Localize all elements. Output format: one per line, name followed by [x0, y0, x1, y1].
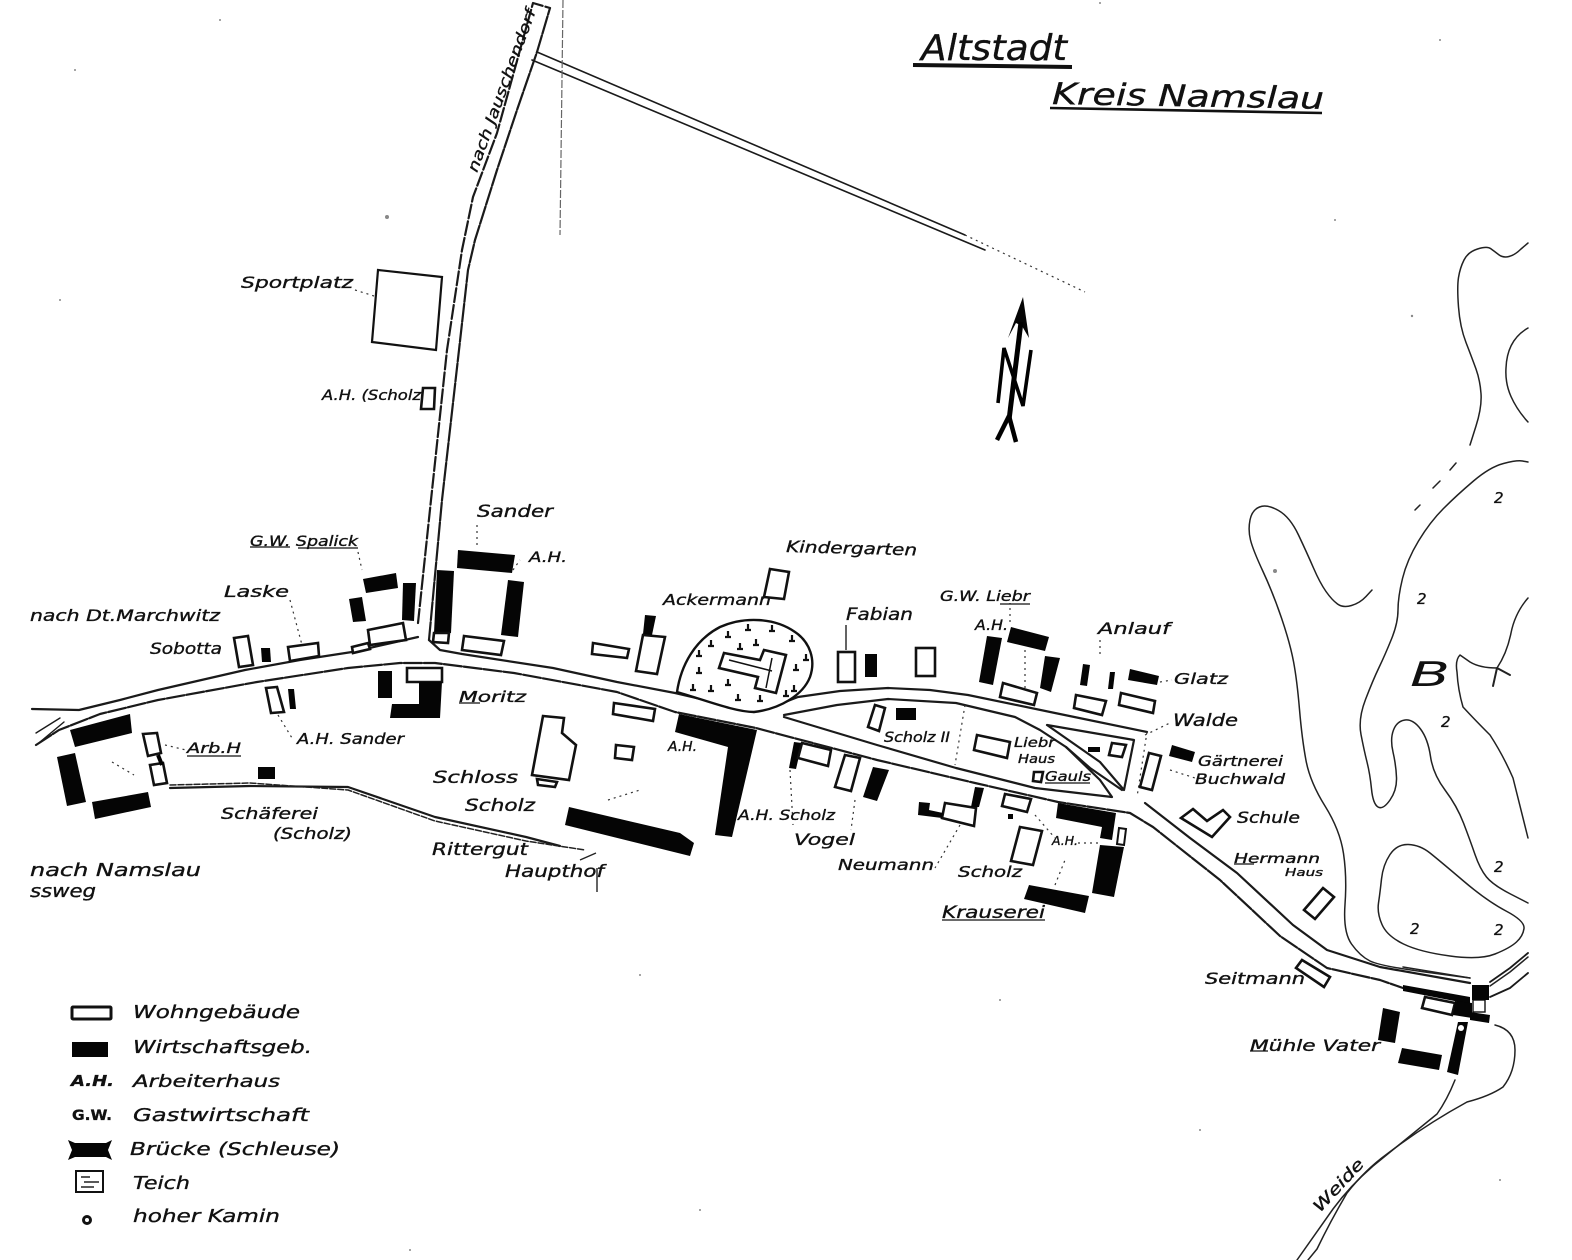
- terrain height marks: 2: [1494, 489, 1504, 507]
- legend: A.H. Arbeiterhaus: A.H.: [70, 1072, 114, 1090]
- farm: Scholz and Krauserei: [1002, 794, 1126, 913]
- buildings: Vogel: [789, 742, 889, 801]
- label: A.H. (Scholz: A.H. (Scholz: [321, 388, 422, 404]
- label: Haus Liebr: Haus: [1018, 752, 1055, 766]
- legend: hoher Kamin: hoher Kamin: [133, 1206, 280, 1227]
- label: Walde: Walde: [1173, 711, 1238, 731]
- legend: G.W. Gastwirtschaft: Gastwirtschaft: [133, 1105, 310, 1126]
- sports field: [372, 270, 442, 350]
- label: Fabian: Fabian: [846, 605, 913, 625]
- label: Arb.H: Arb.H: [186, 741, 242, 757]
- building: Seitmann: [1296, 960, 1330, 987]
- building: Schäferei: [258, 767, 275, 779]
- building: Schloss: [532, 716, 576, 787]
- terrain height marks: 2: [1441, 713, 1451, 731]
- legend: G.W. Gastwirtschaft: G.W.: [72, 1108, 112, 1124]
- label: Schloss: Schloss: [433, 768, 518, 788]
- legend: Teich: [76, 1171, 190, 1194]
- river: Weide: [1297, 1025, 1515, 1260]
- buildings: Fabian: [838, 648, 935, 682]
- subtitle: Kreis Namslau: [1052, 77, 1324, 117]
- buildings: Schloss grounds: [592, 643, 655, 760]
- legend: G.W. Gastwirtschaft: [72, 1105, 310, 1126]
- label: Vogel: Vogel: [794, 830, 856, 849]
- label: nach Namslau: nach Namslau: [30, 860, 201, 881]
- label: Sander: Sander: [477, 502, 554, 522]
- road: north to Jauschendorf: [418, 3, 550, 640]
- farm: G.W. Liebr: [979, 627, 1060, 705]
- terrain contour lines and pond outlines: [1249, 243, 1528, 978]
- label: Haupthof: Haupthof: [505, 862, 608, 882]
- label: Gärtnerei: Gärtnerei: [1198, 754, 1283, 770]
- label: B (Bruch): B: [1410, 655, 1450, 695]
- leader lines: [112, 290, 1195, 892]
- label: Mühle Vater: Mühle Vater: [1250, 1036, 1382, 1055]
- terrain height marks: 2: [1410, 920, 1420, 938]
- label: Krauserei: Krauserei: [942, 903, 1045, 923]
- label: A.H. Sander: A.H. Sander: [296, 730, 405, 748]
- legend: Brücke (Schleuse): [68, 1139, 340, 1160]
- label: Laske: Laske: [224, 582, 289, 601]
- road: main village street: [32, 637, 1403, 988]
- label: Sobotta: Sobotta: [150, 639, 222, 658]
- label: Hermann: Hermann: [1234, 852, 1320, 867]
- buildings: Ackermann: [636, 615, 665, 674]
- building: A.H. Scholz L-shaped barn: [675, 714, 757, 837]
- building: Liebr Haus: [974, 735, 1010, 758]
- north arrow: [997, 297, 1031, 442]
- label: Anlauf: Anlauf: [1097, 619, 1173, 638]
- label: Gauls: Gauls: [1045, 770, 1091, 785]
- road: diagonal field path: [532, 0, 1085, 292]
- label: Rittergut: Rittergut: [432, 840, 530, 860]
- farm: west estate with Arb.H: [57, 714, 167, 819]
- label: Seitmann: Seitmann: [1205, 969, 1305, 988]
- label: Scholz south: Scholz: [958, 863, 1023, 881]
- label: (Scholz): (Scholz): [273, 824, 352, 843]
- label: G.W. Liebr: G.W. Liebr: [940, 589, 1032, 605]
- label: Weide: Weide: [1309, 1154, 1368, 1216]
- legend: Teich: Teich: [133, 1173, 190, 1194]
- buildings: Walde and Gärtnerei: [1140, 745, 1195, 790]
- building: Rittergut Haupthof: [565, 807, 694, 856]
- label: weg: ssweg: [30, 881, 96, 902]
- label: Schule: Schule: [1237, 808, 1300, 827]
- legend: hoher Kamin: [84, 1206, 280, 1227]
- label: Glatz: Glatz: [1174, 670, 1230, 688]
- road: east to mill: [1145, 803, 1528, 997]
- legend: Wohngebäude: [72, 1002, 300, 1023]
- legend: Brücke (Schleuse): Brücke (Schleuse): [130, 1139, 340, 1160]
- label: nach Dt. Marchwitz: nach Dt.Marchwitz: [30, 606, 221, 625]
- buildings: Sobotta and Laske: [234, 636, 319, 667]
- buildings: A.H. Sander: [266, 687, 296, 713]
- farm: G.W. Spalek: [349, 573, 416, 653]
- farm: Moritz: [378, 668, 442, 718]
- label: Moritz: Moritz: [459, 688, 528, 706]
- label: Kindergarten: Kindergarten: [786, 537, 917, 559]
- bridge at mill: [1472, 985, 1489, 1000]
- label: A.H. Krauserei: A.H.: [1051, 834, 1078, 848]
- farm: Sander: [433, 550, 524, 655]
- terrain height marks: 2: [1417, 590, 1427, 608]
- road: upper branch around wedge: [754, 688, 1147, 797]
- buildings: wedge plot: [1088, 743, 1126, 757]
- legend: Wohngebäude: Wohngebäude: [133, 1002, 300, 1023]
- label: Buchwald: Buchwald: [1195, 772, 1285, 788]
- legend: A.H. Arbeiterhaus: Arbeiterhaus: [132, 1072, 280, 1092]
- legend: [68, 1002, 340, 1227]
- building: Kindergarten: [764, 569, 789, 599]
- label: Schäferei: Schäferei: [221, 804, 319, 823]
- legend: A.H. Arbeiterhaus: [70, 1072, 280, 1092]
- label: A.H. east: A.H.: [974, 618, 1008, 634]
- building: Schule: [1181, 809, 1230, 837]
- label: G.W. Spalek: G.W. Spalick: [250, 534, 359, 550]
- terrain height marks: [1410, 489, 1504, 939]
- farm: Mühle Vater: [1378, 985, 1490, 1075]
- label: A.H. north: A.H.: [528, 550, 567, 566]
- terrain height marks: 2: [1494, 921, 1504, 939]
- park: Kindergarten grounds with trees: [677, 620, 812, 712]
- label: A.H. by barn: A.H.: [667, 740, 697, 755]
- label: Neumann: Neumann: [838, 856, 934, 874]
- path: Schäferei lane: [170, 783, 585, 850]
- buildings: Anlauf and Glatz: [1074, 664, 1159, 715]
- building: Gauls: [1033, 772, 1043, 782]
- label: A.H. Scholz: A.H. Scholz: [737, 808, 836, 824]
- label underlines: [187, 547, 1268, 1051]
- building: Hermann Haus: [1304, 888, 1334, 919]
- terrain height marks: 2: [1494, 858, 1504, 876]
- label: Liebr: Liebr: [1014, 736, 1057, 751]
- label: Haus: Haus: [1285, 866, 1323, 879]
- buildings: Scholz II: [868, 705, 916, 731]
- label: Ackermann: Ackermann: [662, 591, 771, 609]
- label: Sportplatz: Sportplatz: [241, 273, 354, 292]
- label: nach Jauschendorf: nach Jauschendorf: [464, 3, 541, 174]
- title: Altstadt: [919, 28, 1069, 69]
- building: A.H. Scholz by road: [421, 388, 435, 409]
- label: Scholz at Schloss: Scholz: [465, 796, 536, 816]
- buildings: Neumann: [918, 787, 984, 826]
- legend: Wirtschaftsgebäude: Wirtschaftsgeb.: [133, 1037, 312, 1058]
- label: Scholz II: Scholz II: [884, 730, 950, 746]
- legend: Wirtschaftsgebäude: [72, 1037, 312, 1058]
